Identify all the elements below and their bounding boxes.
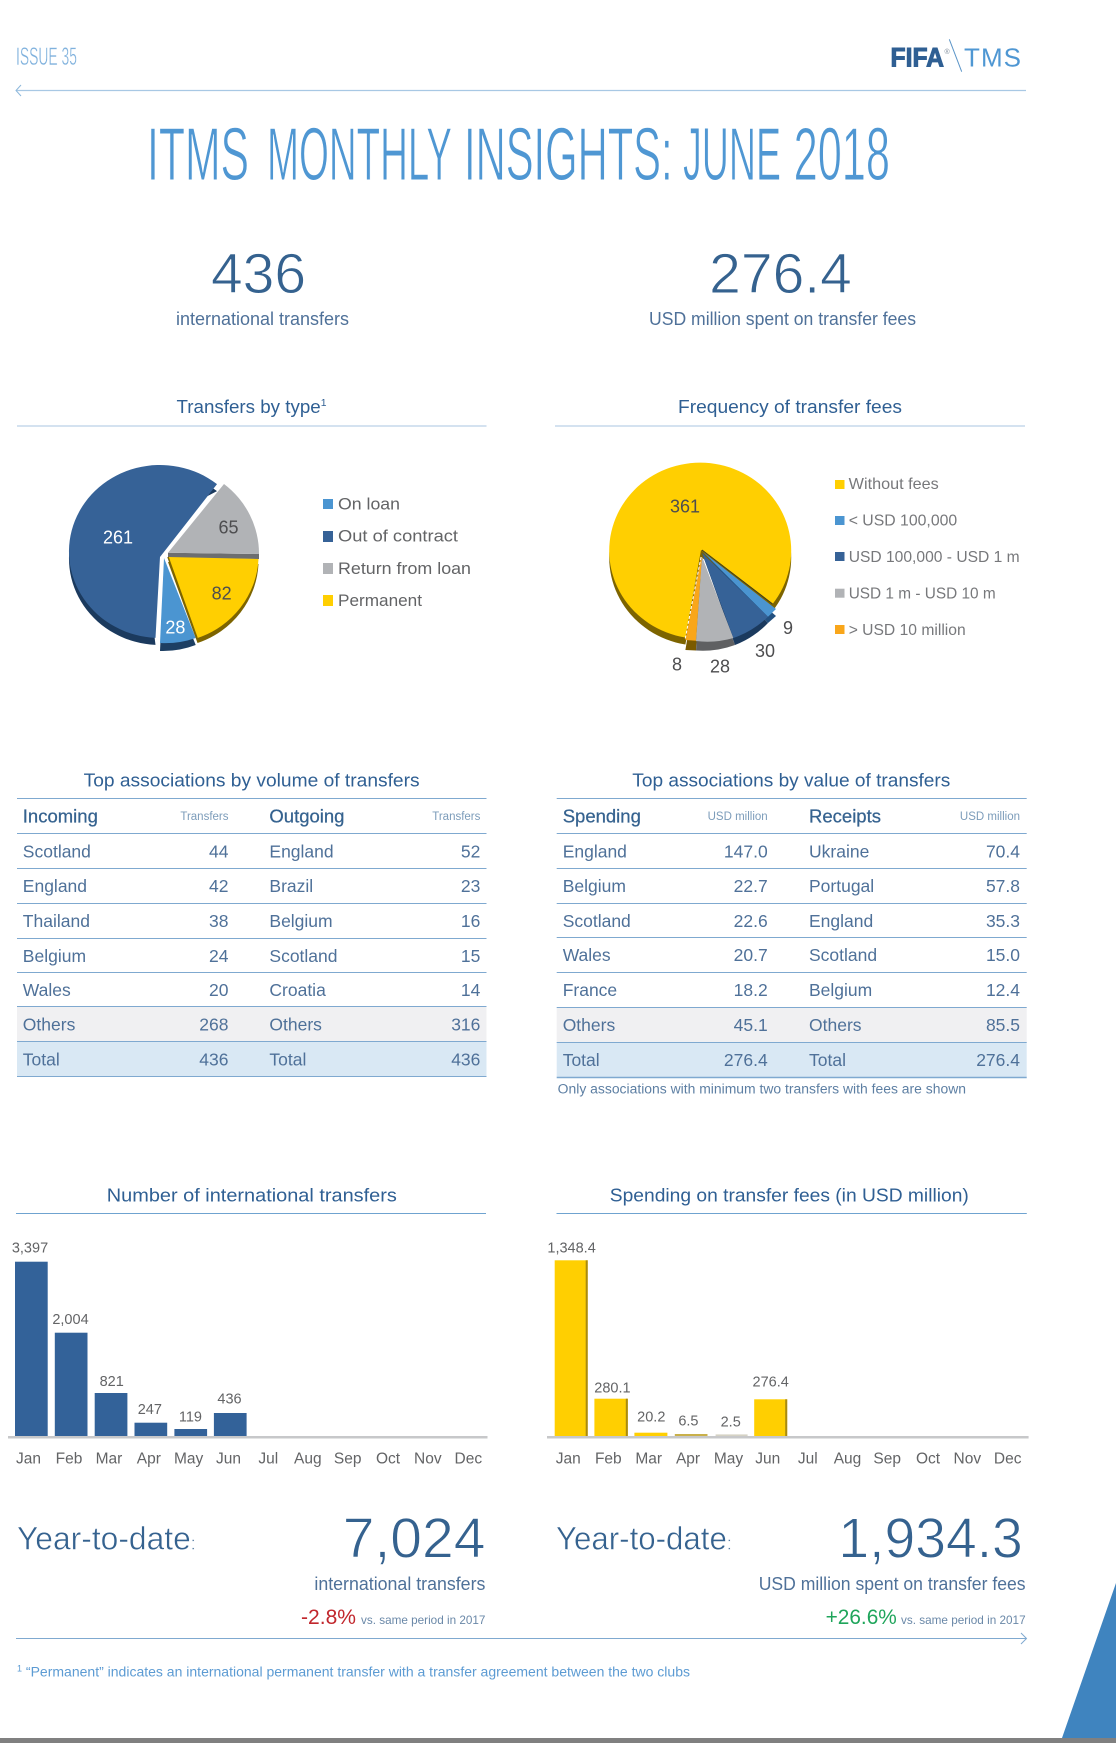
table header row: USD million xyxy=(960,811,1020,823)
table header row: Transfers xyxy=(180,811,229,823)
table rows: Scotland xyxy=(809,945,877,965)
table rows: 44 xyxy=(209,841,229,861)
table rows: Others xyxy=(269,1015,322,1035)
title: ITMS xyxy=(147,112,249,196)
bar chart: spending per month: 1,348.4 xyxy=(547,1240,596,1256)
year-to-date: spending: 1,934.3 xyxy=(838,1506,1023,1570)
table rows: 436 xyxy=(451,1049,480,1069)
title: JUNE xyxy=(683,112,781,196)
table rows: 268 xyxy=(199,1015,228,1035)
table rows: 23 xyxy=(461,876,480,896)
heading: spending on transfer fees: Spending on transfer fees (in USD million) xyxy=(610,1186,969,1206)
table rows: Scotland xyxy=(269,946,338,966)
pie chart: frequency of transfer fees: 30 xyxy=(755,641,775,661)
footnote: “Permanent” indicates an international permanent transfer with a transfer agreement between the two clubs xyxy=(22,1664,690,1680)
legend: frequency of transfer fees: Without fees xyxy=(849,476,939,493)
bar chart: transfers per month: 2,004 xyxy=(52,1312,89,1328)
table rows: Total xyxy=(563,1050,600,1070)
table rows: 42 xyxy=(209,876,228,896)
table rows: France xyxy=(563,980,617,1000)
table rows: 20 xyxy=(209,980,229,1000)
bar chart: spending per month: Jul xyxy=(798,1450,818,1467)
table rows: England xyxy=(269,841,334,861)
year-to-date: transfers: 7,024 xyxy=(343,1506,485,1570)
table rows: 38 xyxy=(209,911,228,931)
table rows: England xyxy=(563,841,627,861)
bar chart: transfers per month: Jan xyxy=(16,1450,41,1467)
pie chart: frequency of transfer fees: 361 xyxy=(670,496,700,516)
bar chart: spending per month: Aug xyxy=(834,1450,861,1467)
table note: Only associations with minimum two transfers with fees are shown xyxy=(558,1081,966,1096)
table rows: 35.3 xyxy=(986,911,1020,931)
title: 2018 xyxy=(794,112,890,196)
logo: FIFA TMS: TMS xyxy=(964,43,1021,73)
year-to-date: transfers: Year-to-date: xyxy=(17,1520,196,1556)
bar chart: transfers per month: Mar xyxy=(96,1450,122,1467)
pie chart: transfers by type xyxy=(69,465,259,651)
logo: FIFA TMS: FIFA xyxy=(890,43,944,73)
panel: transfers by type xyxy=(17,397,486,651)
table rows: 15 xyxy=(461,946,480,966)
table rows: Brazil xyxy=(269,876,313,896)
pie chart: frequency of transfer fees: 28 xyxy=(710,656,730,676)
heading: transfers by type: 1 xyxy=(321,398,327,409)
bar chart: spending per month: 280.1 xyxy=(594,1380,631,1396)
bar chart: spending per month: May xyxy=(714,1450,743,1467)
table header row: Receipts xyxy=(809,806,881,827)
panel: spending on transfer fees xyxy=(547,1186,1029,1467)
table rows: 22.7 xyxy=(734,876,768,896)
title: MONTHLY xyxy=(267,112,452,196)
table rows: England xyxy=(809,911,873,931)
table rows: 70.4 xyxy=(986,841,1020,861)
table rows: Belgium xyxy=(809,980,872,1000)
table rows: 147.0 xyxy=(724,841,768,861)
bar chart: spending per month: 2.5 xyxy=(721,1415,741,1431)
legend: frequency of transfer fees xyxy=(835,476,1020,639)
legend: transfers by type: Out of contract xyxy=(338,527,458,546)
legend: frequency of transfer fees: USD 1 m - USD 10 m xyxy=(849,586,996,603)
table header row: Transfers xyxy=(432,811,481,823)
panel: number of international transfers xyxy=(8,1186,488,1467)
stat: international transfers: 436 xyxy=(211,242,306,306)
bar chart: spending per month xyxy=(547,1240,1029,1467)
bar chart: spending per month: 6.5 xyxy=(678,1413,698,1429)
table rows: 15.0 xyxy=(986,945,1020,965)
bar chart: spending per month: Nov xyxy=(954,1450,981,1467)
bar chart: spending per month: 20.2 xyxy=(637,1410,665,1426)
table rows: Belgium xyxy=(563,876,626,896)
table header row: Spending xyxy=(563,806,641,827)
bar chart: transfers per month: May xyxy=(174,1450,203,1467)
bar chart: transfers per month: 436 xyxy=(217,1391,242,1407)
bottom grey band xyxy=(0,1738,1116,1743)
table rows xyxy=(23,841,481,1069)
year-to-date: spending xyxy=(556,1506,1026,1629)
legend: frequency of transfer fees: USD 100,000 - USD 1 m xyxy=(849,549,1020,566)
year-to-date: spending: Year-to-date: xyxy=(556,1520,732,1556)
table rows: 20.7 xyxy=(734,945,768,965)
pie chart: frequency of transfer fees: 9 xyxy=(783,618,793,638)
table rows: 12.4 xyxy=(986,980,1020,1000)
bar chart: spending per month: Dec xyxy=(994,1450,1022,1467)
table rows: Total xyxy=(23,1049,60,1069)
bar chart: transfers per month: Jul xyxy=(258,1450,278,1467)
table rows: Wales xyxy=(563,945,611,965)
bar chart: transfers per month: Feb xyxy=(56,1450,82,1467)
issue label: ISSUE 35 xyxy=(16,43,77,71)
stat: international transfers: international transfers xyxy=(176,309,349,329)
bar chart: transfers per month: 821 xyxy=(100,1374,124,1390)
legend: transfers by type: Permanent xyxy=(338,591,422,610)
table header row xyxy=(23,806,481,827)
table rows: Total xyxy=(269,1049,306,1069)
legend: transfers by type: On loan xyxy=(338,494,400,514)
year-to-date: spending: USD million spent on transfer fees xyxy=(759,1574,1026,1594)
heading: top associations by value: Top associations by value of transfers xyxy=(632,771,950,791)
table rows: Belgium xyxy=(269,911,333,931)
pie chart: transfers by type: 65 xyxy=(218,518,239,538)
heading: top associations by volume: Top associations by volume of transfers xyxy=(84,771,420,791)
bar chart: transfers per month: Sep xyxy=(334,1450,361,1467)
table rows: Scotland xyxy=(23,841,91,861)
table rows: 22.6 xyxy=(734,911,768,931)
bar chart: spending per month: Jan xyxy=(556,1450,581,1467)
panel: table by value xyxy=(557,771,1027,1096)
table rows: Total xyxy=(809,1050,846,1070)
table rows: England xyxy=(23,876,87,896)
year-to-date: transfers xyxy=(17,1506,486,1629)
legend: frequency of transfer fees: > USD 10 million xyxy=(849,622,966,639)
heading: frequency of transfer fees: Frequency of transfer fees xyxy=(678,397,902,417)
bar chart: spending per month: Sep xyxy=(873,1450,901,1467)
table rows: 276.4 xyxy=(724,1050,768,1070)
corner triangle xyxy=(1062,1583,1116,1738)
year-to-date: transfers: vs. same period in 2017 xyxy=(361,1613,486,1627)
bar chart: spending per month: 276.4 xyxy=(753,1375,789,1391)
pie chart: transfers by type: 82 xyxy=(212,584,232,604)
legend: transfers by type: Return from loan xyxy=(338,559,471,578)
table rows: 85.5 xyxy=(986,1015,1020,1035)
bar chart: spending per month: Oct xyxy=(916,1450,941,1467)
table header row xyxy=(563,806,1020,827)
panel: table by volume xyxy=(17,771,486,1076)
legend: frequency of transfer fees: < USD 100,000 xyxy=(849,513,957,530)
table rows: Wales xyxy=(23,980,71,1000)
pie chart: frequency of transfer fees xyxy=(609,463,793,676)
panel: frequency of transfer fees xyxy=(555,397,1025,676)
table rows: 24 xyxy=(209,946,229,966)
table rows: 14 xyxy=(461,980,481,1000)
table header row: Incoming xyxy=(23,806,98,827)
table rows: Thailand xyxy=(23,911,90,931)
bar chart: transfers per month: Jun xyxy=(216,1450,241,1467)
year-to-date: transfers: -2.8% xyxy=(301,1606,356,1629)
title xyxy=(147,112,890,196)
bar chart: transfers per month: Aug xyxy=(294,1450,322,1467)
pie chart: transfers by type: 28 xyxy=(165,618,185,638)
table rows: 18.2 xyxy=(734,980,768,1000)
stat: spending: USD million spent on transfer fees xyxy=(649,309,916,329)
pie chart: frequency of transfer fees: 8 xyxy=(672,654,682,674)
arrow: top rule pointing left xyxy=(16,85,1026,96)
table rows: 16 xyxy=(461,911,480,931)
table rows: Others xyxy=(809,1015,862,1035)
heading: transfers by type: Transfers by type xyxy=(176,397,315,417)
logo: FIFA TMS xyxy=(890,39,1021,73)
bar chart: transfers per month xyxy=(8,1241,488,1467)
bar chart: transfers per month: Dec xyxy=(455,1450,482,1467)
table header row: USD million xyxy=(708,811,768,823)
table rows: Croatia xyxy=(269,980,326,1000)
table rows: Ukraine xyxy=(809,841,869,861)
bar chart: spending per month: Feb xyxy=(595,1450,622,1467)
table rows: Others xyxy=(563,1015,615,1035)
table header row: Outgoing xyxy=(269,806,344,827)
heading: number of international transfers: Number of international transfers xyxy=(107,1186,397,1206)
bar chart: transfers per month: Oct xyxy=(376,1450,401,1467)
table rows xyxy=(563,841,1020,1070)
table rows: 436 xyxy=(199,1049,228,1069)
bar chart: spending per month: Jun xyxy=(755,1450,780,1467)
table rows: Portugal xyxy=(809,876,874,896)
year-to-date: spending: +26.6% xyxy=(826,1606,897,1629)
bar chart: spending per month: Apr xyxy=(676,1450,700,1467)
stat: spending xyxy=(649,242,916,329)
bar chart: transfers per month: Nov xyxy=(414,1450,442,1467)
table rows: 57.8 xyxy=(986,876,1020,896)
title: INSIGHTS: xyxy=(464,112,673,196)
bar chart: transfers per month: 3,397 xyxy=(12,1241,48,1257)
table rows: 316 xyxy=(451,1015,480,1035)
year-to-date: spending: vs. same period in 2017 xyxy=(901,1613,1026,1627)
bar chart: transfers per month: Apr xyxy=(137,1450,161,1467)
stat: spending: 276.4 xyxy=(709,242,852,306)
stat: international transfers xyxy=(176,242,349,329)
arrow: bottom rule pointing right xyxy=(16,1633,1026,1644)
table rows: 276.4 xyxy=(976,1050,1020,1070)
logo: FIFA TMS: ® xyxy=(944,48,950,56)
table rows: Belgium xyxy=(23,946,86,966)
table rows: Others xyxy=(23,1015,76,1035)
year-to-date: transfers: international transfers xyxy=(314,1574,485,1594)
table rows: Scotland xyxy=(563,911,631,931)
table rows: 45.1 xyxy=(734,1015,768,1035)
pie chart: transfers by type: 261 xyxy=(103,528,133,548)
footnote: 1 xyxy=(17,1664,22,1674)
legend: transfers by type xyxy=(323,494,471,610)
table rows: 52 xyxy=(461,841,480,861)
bar chart: spending per month: Mar xyxy=(635,1450,662,1467)
bar chart: transfers per month: 247 xyxy=(138,1402,162,1418)
bar chart: transfers per month: 119 xyxy=(179,1410,202,1426)
